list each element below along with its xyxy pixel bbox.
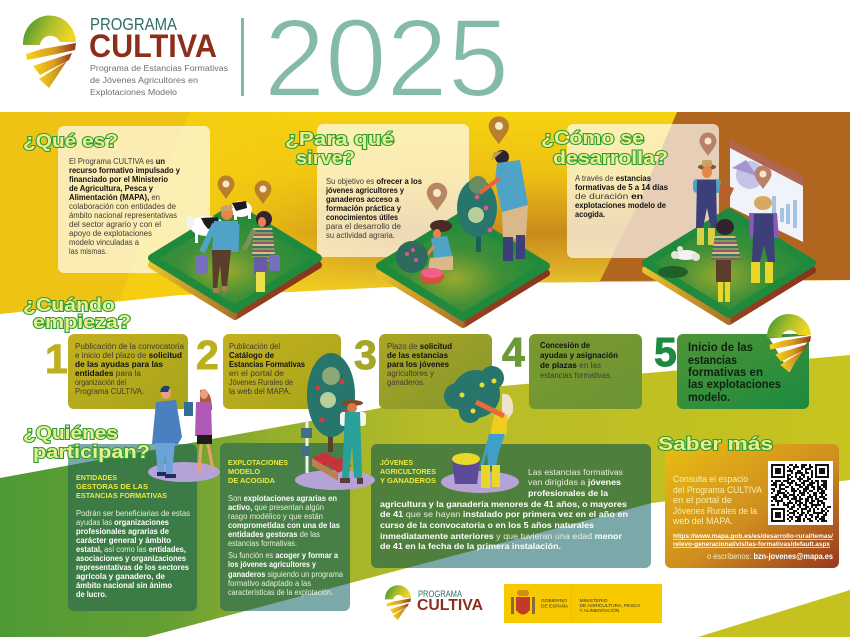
step 3 text: Plazo de solicitud — [387, 342, 452, 351]
text: que es: las mismas. — [69, 247, 107, 256]
heading: quienes participan: participan? — [33, 441, 150, 462]
step 5 text: modelo. — [688, 391, 730, 404]
text: como se desarrolla: acogida. — [575, 210, 605, 219]
text: que es: El Programa CULTIVA es un — [69, 157, 165, 166]
text: ministerio: Y ALIMENTACIÓN — [580, 607, 620, 614]
heading: cuando empieza: empieza? — [33, 311, 131, 332]
step 3 text: agricultores y — [387, 369, 434, 378]
panel: explotaciones modelo — [220, 443, 350, 611]
logo subtitle: Explotaciones Modelo — [90, 87, 177, 97]
text: gobierno de espana: DE ESPAÑA — [541, 602, 569, 610]
text: entidades gestoras: ámbito nacional sin ánimo — [76, 581, 172, 590]
text: consulta: del Programa CULTIVA — [673, 485, 762, 495]
top background band — [0, 112, 850, 314]
text: jovenes agricultores: curso de la convocatoria o en los 5 años naturales — [380, 521, 595, 530]
heading: cuando empieza: ¿Cuándo — [23, 294, 115, 315]
text: consulta: Consulta el espacio — [673, 474, 748, 484]
step 2 text: Estancias Formativas — [229, 360, 306, 369]
step 5 text: formativas en — [688, 366, 763, 379]
step 4 text: ayudas y asignación — [540, 351, 618, 360]
number 4: 4 — [502, 329, 525, 375]
logo subtitle — [90, 63, 228, 97]
text: explotaciones modelo: activo, que presentan algún — [228, 503, 324, 512]
text: para que sirve: jóvenes agricultores y — [325, 186, 405, 195]
title: entidades gestoras — [76, 473, 167, 500]
text: entidades gestoras: profesionales agrarias de — [76, 527, 170, 536]
step 4 — [502, 329, 642, 409]
text: ministerio: DE AGRICULTURA, PESCA — [580, 603, 641, 609]
text: gobierno de espana: GOBIERNO — [541, 598, 567, 604]
text: jovenes agricultores: inmediatamente anteriores y que tuvieran una edad menor — [380, 532, 622, 541]
text: entidades gestoras: carácter general y ámbito — [76, 536, 171, 545]
icon: pin 4 — [427, 183, 447, 211]
text: consulta: web del MAPA. — [672, 516, 733, 526]
link — [673, 533, 833, 548]
footer logo programa cultiva — [385, 585, 483, 620]
icon: pin 5 — [700, 132, 716, 156]
step 2 — [196, 332, 341, 409]
illustration: orange tree, woman and bucket — [441, 366, 519, 493]
title: explotaciones modelo: MODELO — [228, 467, 260, 476]
text: jovenes agricultores: de 41 en la fecha de la primera instalación. — [380, 542, 561, 551]
text: para que sirve: conocimientos útiles — [326, 213, 399, 222]
text: jovenes agricultores — [380, 468, 628, 551]
step 2 text: Publicación del — [229, 342, 280, 351]
platform 1 — [152, 207, 318, 316]
footer wordmark PROGRAMA: PROGRAMA — [418, 589, 462, 599]
title: explotaciones modelo — [228, 458, 288, 485]
step 1 — [45, 334, 188, 409]
step 4 text: de plazas en las — [540, 361, 601, 370]
text: para que sirve: ganaderos acceso a — [326, 195, 400, 204]
illustration: man pruning — [480, 150, 528, 261]
text: que es: Alimentación (MAPA), en — [69, 193, 160, 202]
heading: como se desarrolla: desarrolla? — [553, 147, 668, 168]
whiteboard — [730, 140, 803, 242]
text: que es: de Agricultura, Pesca y — [69, 184, 154, 193]
step 3 — [354, 332, 492, 409]
step 4 text: Concesión de — [540, 341, 591, 350]
heading: para que sirve — [285, 128, 394, 168]
icon: coat of arms — [511, 590, 535, 614]
heading: quienes participan — [23, 422, 150, 462]
title: jovenes agricultores: Y GANADEROS — [380, 476, 436, 485]
title: entidades gestoras: ESTANCIAS FORMATIVAS — [76, 491, 167, 500]
step 4 text: estancias formativas. — [540, 371, 612, 380]
text: consulta — [672, 474, 762, 526]
panel: como se desarrolla — [567, 124, 719, 258]
text: explotaciones modelo: los jóvenes agricultores y — [228, 560, 317, 569]
text: consulta: en el portal de — [673, 495, 732, 505]
illustration: farmer with purple shirt — [749, 196, 779, 283]
text: jovenes agricultores: de 41 que se hayan instalado por primera vez en el año en — [380, 510, 628, 519]
illustration: tree, farmer and crates — [295, 353, 375, 490]
title: explotaciones modelo: DE ACOGIDA — [228, 476, 276, 485]
text: para que sirve: para el desarrollo de — [326, 222, 402, 231]
number 3: 3 — [354, 332, 377, 378]
text: entidades gestoras — [76, 509, 190, 599]
step 1 text: de las ayudas para las — [75, 360, 164, 369]
step 5 — [654, 314, 811, 409]
text: jovenes agricultores: Las estancias formativas — [528, 468, 623, 477]
step 1 text: entidades para la — [75, 369, 142, 378]
year 2025: 2025 — [264, 0, 509, 120]
panel: saber mas — [658, 433, 839, 568]
step 1 text: Programa CULTIVA. — [75, 387, 144, 396]
step 2 text: en el portal de — [229, 369, 285, 378]
illustration: tall tree shrub — [457, 176, 497, 252]
step 1 text: organización del — [75, 378, 126, 387]
step 3 text: para los jóvenes — [387, 360, 450, 369]
panel: que es — [58, 126, 210, 273]
illustration: drone and plant — [658, 246, 700, 278]
text: explotaciones modelo: formativo adaptado a las — [228, 579, 311, 588]
heading: quienes participan: ¿Quiénes — [23, 422, 118, 443]
text: para que sirve: Su objetivo es ofrecer a los — [326, 177, 423, 186]
text: que es: del sector agrario y con el — [69, 220, 161, 229]
email: o escríbenos: bzn-jovenes@mapa.es — [707, 552, 833, 561]
text: entidades gestoras: ayudas las organizaciones — [76, 518, 170, 527]
text: entidades gestoras: asociaciones y organizaciones — [76, 554, 187, 563]
logo wordmark CULTIVA: CULTIVA — [89, 28, 217, 64]
number 2: 2 — [196, 332, 219, 378]
step 1 text: e inicio del plazo de solicitud — [75, 351, 182, 360]
text: para que sirve: su actividad agraria. — [326, 231, 395, 240]
number 5: 5 — [654, 329, 677, 375]
panel: entidades gestoras — [68, 444, 197, 611]
illustration: farmer with tablet — [693, 160, 734, 245]
text: que es: recurso formativo impulsado y — [69, 166, 181, 175]
text: como se desarrolla: A través de estancias — [575, 174, 652, 183]
step 5 text: Inicio de las — [688, 341, 753, 354]
text: jovenes agricultores: profesionales de la — [528, 489, 609, 498]
illustration: woman with buckets — [244, 211, 280, 292]
panel: para que sirve — [317, 124, 469, 257]
step 2 text — [229, 342, 306, 396]
text: que es — [69, 157, 181, 256]
step 1 text: Publicación de la convocatoria — [75, 342, 185, 351]
text: explotaciones modelo: entidades gestoras de las — [228, 530, 320, 539]
text: explotaciones modelo: ganaderos siguiendo un programa — [228, 570, 344, 579]
illustration: woman from behind — [711, 219, 741, 302]
text: que es: modelo vinculadas a — [69, 238, 140, 247]
step 2 text: Catálogo de — [229, 351, 275, 360]
heading: para que sirve: ¿Para qué — [285, 128, 394, 149]
text: explotaciones modelo: características de la explotación. — [228, 588, 333, 597]
step 5 text: las explotaciones — [688, 378, 781, 391]
text: entidades gestoras: Podrán ser beneficiarias de estas — [76, 509, 190, 518]
text: que es: colaboración con entidades de — [69, 202, 177, 211]
step 2 text: Jóvenes Rurales de — [229, 378, 294, 387]
link: relevo-generacional/visitas-formativas/default.aspx — [673, 541, 830, 548]
title: jovenes agricultores: JÓVENES — [380, 458, 413, 467]
step 3 text — [387, 342, 452, 387]
header logo — [23, 14, 228, 97]
text: consulta: Jóvenes Rurales de la — [673, 506, 757, 516]
title: jovenes agricultores: AGRICULTORES — [380, 467, 436, 476]
text: ministerio: MINISTERIO — [580, 598, 608, 604]
title: entidades gestoras: GESTORAS DE LAS — [76, 482, 148, 491]
illustration: man and woman with tablet — [148, 386, 220, 482]
icon: logo pin on step 5 — [767, 314, 811, 372]
platform 3 — [646, 212, 812, 321]
text: ministerio — [580, 598, 641, 614]
text: para que sirve: formación práctica y — [326, 204, 402, 213]
heading: como se desarrolla — [541, 127, 668, 168]
step 4 text — [540, 341, 618, 380]
link: https://www.mapa.gob.es/es/desarrollo-rural/temas/ — [673, 533, 833, 540]
heading: cuando empieza — [23, 294, 131, 332]
text: entidades gestoras: de lucro. — [76, 590, 107, 599]
text: explotaciones modelo — [228, 494, 344, 597]
text: gobierno de espana — [541, 598, 569, 610]
text: como se desarrolla: formativas de 5 a 14 días — [575, 183, 669, 192]
bottom field background — [0, 355, 850, 637]
illustration: man with buckets — [195, 205, 238, 293]
illustration: woman crouching with basket — [396, 220, 453, 284]
heading: que es: ¿Qué es? — [23, 130, 118, 151]
step 5 text: estancias — [688, 354, 737, 367]
step 3 text: ganaderos. — [387, 378, 425, 387]
icon: pin 1 — [218, 176, 234, 199]
text: que es: apoyo de explotaciones — [69, 229, 152, 238]
logo subtitle: Programa de Estancias Formativas — [90, 63, 228, 73]
title: entidades gestoras: ENTIDADES — [76, 473, 117, 482]
text: para que sirve — [325, 177, 423, 240]
heading: saber mas: Saber más — [658, 433, 773, 454]
text: explotaciones modelo: comprometidas con una de las — [228, 521, 341, 530]
logo wordmark PROGRAMA: PROGRAMA — [90, 14, 177, 34]
step 3 text: de las estancias — [387, 351, 449, 360]
qr code — [768, 461, 833, 525]
heading: como se desarrolla: ¿Cómo se — [541, 127, 644, 148]
icon: pin 6 — [754, 166, 772, 189]
text: como se desarrolla: explotaciones modelo de — [575, 201, 667, 210]
icon: pin 2 — [254, 180, 272, 204]
text: que es: ámbito nacional representativas — [69, 211, 177, 220]
text: jovenes agricultores: agricultura y la ganadería menores de 41 años, o mayores — [380, 500, 628, 509]
illustration: cows — [186, 201, 252, 243]
step 5 text — [688, 341, 781, 404]
text: explotaciones modelo: estancias formativas. — [228, 539, 297, 548]
platform 2 — [380, 215, 546, 324]
text: jovenes agricultores: van dirigidas a jóvenes — [528, 478, 622, 487]
text: entidades gestoras: representativas de los sectores — [76, 563, 190, 572]
footer government logo — [504, 584, 662, 623]
icon: pin 3 — [489, 116, 509, 144]
heading: para que sirve: sirve? — [296, 147, 355, 168]
text: explotaciones modelo: Su función es acoger y formar a — [228, 551, 339, 560]
title: explotaciones modelo: EXPLOTACIONES — [228, 458, 288, 467]
text: como se desarrolla: de duración en — [575, 192, 643, 201]
text: como se desarrolla — [575, 174, 669, 219]
text: explotaciones modelo: Son explotaciones agrarias en — [228, 494, 337, 503]
title: jovenes agricultores — [380, 458, 436, 485]
step 1 text — [75, 342, 185, 396]
logo subtitle: de Jóvenes Agricultores en — [90, 75, 198, 85]
step 2 text: la web del MAPA. — [229, 387, 291, 396]
text: entidades gestoras: agrícola y ganadero, de — [76, 572, 166, 581]
footer wordmark CULTIVA: CULTIVA — [417, 597, 483, 614]
panel: jovenes agricultores — [371, 444, 651, 568]
text: entidades gestoras: estatal, así como las entidades, — [76, 545, 186, 554]
text: explotaciones modelo: rasgo modélico y que están — [228, 512, 323, 521]
number 1: 1 — [45, 336, 68, 382]
text: que es: financiado por el Ministerio — [69, 175, 168, 184]
